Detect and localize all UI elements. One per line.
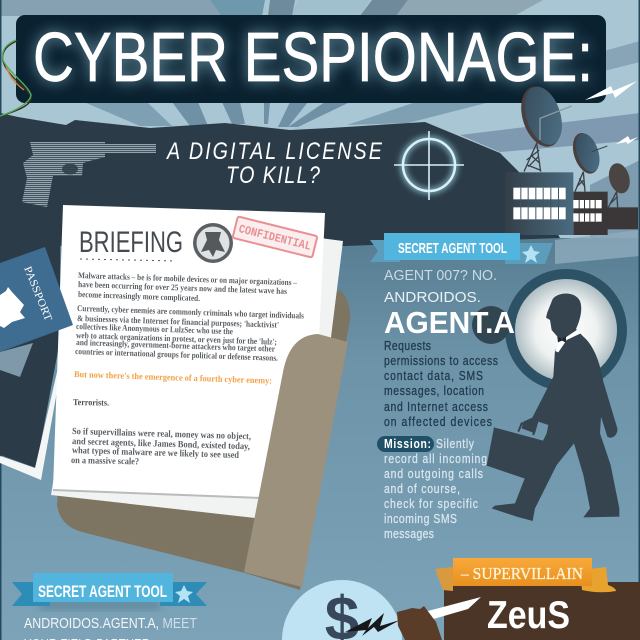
bottom-left banner: secret agent tool — [12, 573, 207, 610]
sunburst rays — [0, 0, 640, 240]
subtitle: A DIGITAL LICENSE — [165, 137, 382, 164]
lightning bolts — [585, 81, 638, 144]
briefing text: Currently, cyber enemies are commonly criminals who target individuals — [77, 303, 305, 321]
agent description: contact data, SMS — [384, 369, 483, 383]
agent heading — [384, 268, 515, 340]
briefing text: & businesses via the Internet for financial purposes; 'hacktivist' — [77, 313, 279, 330]
mission block: record all incoming — [384, 452, 487, 466]
supervillain banner: – SUPERVILLAIN — [460, 564, 583, 583]
agent heading: ANDROIDOS. — [384, 289, 481, 306]
wires — [0, 40, 31, 116]
agent description: permissions to access — [384, 354, 498, 368]
hand gun — [22, 142, 156, 207]
briefing text: what types of malware are we likely to see used — [72, 446, 240, 461]
passport card — [0, 343, 33, 377]
passport: PASSPORT — [21, 265, 54, 323]
subtitle — [165, 137, 382, 188]
icon: seal — [193, 223, 233, 263]
dollar circle — [282, 580, 402, 640]
background sky — [0, 0, 640, 250]
right banner: secret agent tool: SECRET AGENT TOOL — [398, 240, 507, 257]
briefing text: on a massive scale? — [71, 456, 139, 467]
light band below buildings — [555, 230, 640, 264]
bottom-left text: ANDROIDOS.AGENT.A, MEET — [24, 615, 197, 632]
agent heading: AGENT 007? NO. — [384, 268, 497, 284]
briefing text: Terrorists. — [73, 397, 109, 408]
briefing heading: BRIEFING — [79, 226, 183, 259]
briefing text: web to attack organizations in protest, or even just for the 'lulz'; — [76, 330, 277, 347]
right banner: secret agent tool — [370, 233, 553, 264]
agent heading: AGENT.A — [384, 305, 515, 340]
mission block: Mission: — [384, 437, 431, 451]
crosshair icon — [394, 131, 464, 200]
briefing paper — [53, 205, 325, 499]
mountain silhouette — [0, 113, 560, 468]
agent description: and Internet access — [384, 400, 488, 414]
mission block — [377, 436, 487, 541]
briefing text: and secret agents, like James Bond, existed today, — [72, 437, 251, 452]
mission block: check for specific — [384, 497, 478, 511]
mission block: incoming SMS — [384, 512, 457, 526]
notebook white edge — [0, 372, 60, 480]
sheet behind — [51, 238, 343, 518]
agent portrait circle — [472, 269, 627, 391]
bottom-left banner: secret agent tool: SECRET AGENT TOOL — [38, 582, 167, 601]
subtitle: TO KILL? — [226, 161, 321, 188]
agent description: messages, location — [384, 384, 484, 398]
briefing text: have been occurring for over 25 years now and the latest wave has — [78, 279, 288, 296]
agent description — [384, 339, 498, 429]
agent description: on affected devices — [384, 415, 492, 429]
passport — [0, 247, 73, 352]
folder back — [57, 290, 350, 590]
confidential stamp: CONFIDENTIAL — [237, 222, 312, 254]
mission block: and of course, — [384, 482, 460, 496]
supervillain banner — [435, 558, 616, 592]
supervillain panel — [444, 582, 640, 640]
agent description: Requests — [384, 339, 431, 353]
folder front flap — [244, 334, 348, 587]
mission block: Silently — [436, 437, 474, 451]
agent silhouette — [487, 293, 619, 521]
villain hand and lightning — [345, 597, 481, 640]
dashed rule — [80, 259, 176, 261]
briefing text: countries or international groups for political or defense reasons. — [75, 346, 278, 363]
mission block: messages — [384, 527, 434, 541]
briefing text: Malware attacks – be is for mobile devices or on major organizations – — [78, 270, 298, 287]
briefing text: So if supervillains were real, money was no object, — [72, 427, 252, 442]
briefing text: collectives like Anonymous or LulzSec who use the — [76, 321, 233, 336]
bottom-left text — [24, 615, 197, 640]
briefing text: But now there's the emergence of a fourth cyber enemy: — [74, 369, 272, 386]
satellite dishes and buildings — [505, 81, 638, 235]
briefing text: become increasingly more complicated. — [78, 289, 200, 303]
briefing text — [71, 270, 305, 467]
mission block: and outgoing calls — [384, 467, 483, 481]
zeus name: ZeuS — [487, 594, 570, 637]
briefing text: and increasingly, government-borne attackers who target other — [76, 337, 275, 354]
mid background — [0, 238, 640, 640]
